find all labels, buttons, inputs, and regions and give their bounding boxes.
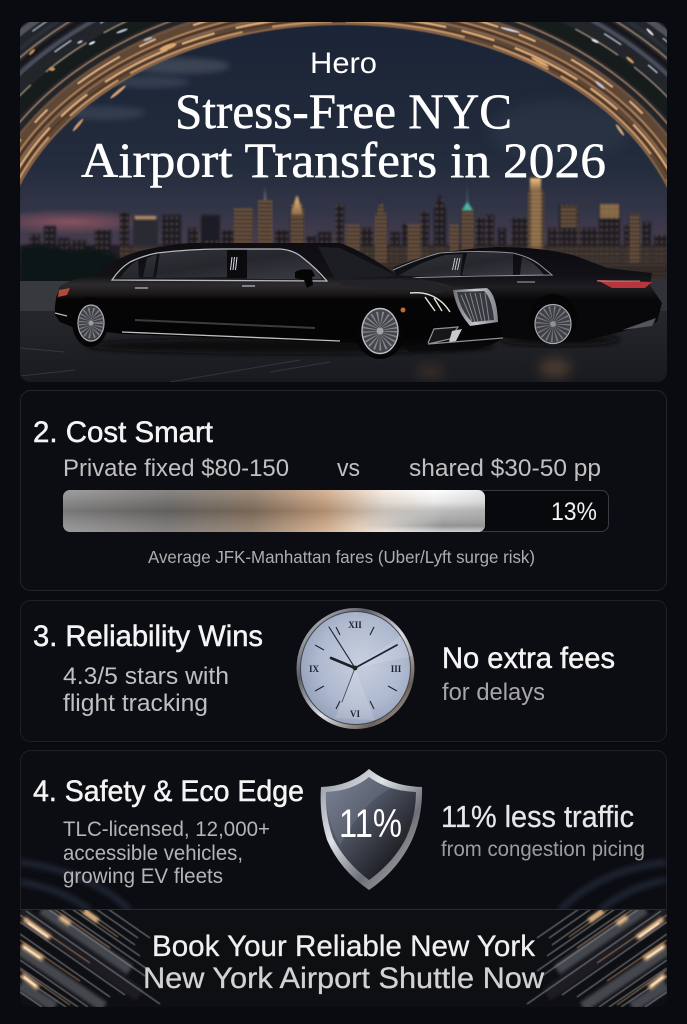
icon: shield with 11%: 11% (339, 802, 402, 846)
panel: reliability wins (20, 600, 666, 742)
heading: cost smart: 2. Cost Smart (33, 416, 214, 449)
diagonal light streaks right (527, 909, 667, 1007)
callout: less traffic: 11% less traffic (441, 799, 634, 834)
city skyline (20, 178, 667, 291)
icon: shield with 11% (321, 769, 422, 890)
grille (453, 288, 498, 326)
arch of light streaks (20, 22, 667, 270)
lower bumper chrome (428, 327, 503, 344)
safety details: TLC-licensed, 12,000+ (63, 817, 270, 841)
safety details (63, 817, 270, 888)
limousine front car (55, 243, 503, 359)
hero title: Stress-Free NYC (175, 83, 512, 139)
callout: no extra fees: for delays (442, 679, 545, 706)
callout: less traffic: from congestion picing (441, 837, 645, 861)
panel: hero (0, 0, 687, 698)
fare comparison: Private fixed $80-150 (63, 455, 289, 482)
diagonal light streaks left (20, 909, 160, 1007)
hero title (81, 95, 605, 188)
icon: clock: VI (350, 709, 360, 719)
headlight (410, 293, 450, 312)
callout: less traffic (441, 799, 645, 861)
sparkles on the arch (28, 26, 654, 137)
progress bar 13%: 13% (551, 498, 597, 526)
reliability details: 4.3/5 stars with (63, 663, 229, 690)
panel: cost smart (20, 390, 666, 590)
sedan behind limousine (393, 247, 662, 344)
wheel: second car (529, 294, 577, 344)
wheel: limousine rear (72, 297, 108, 347)
hero eyebrow: Hero (310, 47, 377, 80)
panel: safety and eco edge (20, 750, 667, 920)
panel: call to action (20, 909, 667, 1007)
fare comparison: shared $30-50 pp (409, 455, 601, 482)
call to action text (143, 930, 544, 995)
icon: clock (296, 608, 414, 729)
icon: clock: III (391, 664, 402, 674)
safety details: accessible vehicles, (63, 841, 243, 865)
distant treeline and wall (20, 245, 667, 313)
reliability details (63, 663, 229, 717)
hero title: Airport Transfers in 2026 (81, 132, 606, 188)
callout: no extra fees: No extra fees (442, 642, 615, 675)
side mirror (295, 269, 315, 288)
fare comparison: vs (337, 455, 360, 482)
reliability details: flight tracking (63, 690, 208, 717)
progress bar 13% (63, 490, 608, 532)
icon: clock: XII (348, 620, 362, 630)
parking lot ground (20, 311, 667, 382)
icon: clock: IX (309, 664, 319, 674)
clock hands (329, 627, 397, 702)
caption: Average JFK-Manhattan fares (Uber/Lyft surge risk) (148, 547, 535, 567)
safety details: growing EV fleets (63, 864, 223, 888)
call to action text: New York Airport Shuttle Now (143, 962, 544, 995)
faint blue light streaks (20, 862, 667, 910)
callout: no extra fees (442, 642, 615, 706)
call to action text: Book Your Reliable New York (152, 930, 536, 963)
wheel: limousine front (355, 303, 405, 359)
fare comparison (63, 455, 601, 482)
heading: safety: 4. Safety & Eco Edge (33, 775, 304, 808)
hero night sky (20, 22, 667, 279)
heading: reliability: 3. Reliability Wins (33, 620, 263, 653)
